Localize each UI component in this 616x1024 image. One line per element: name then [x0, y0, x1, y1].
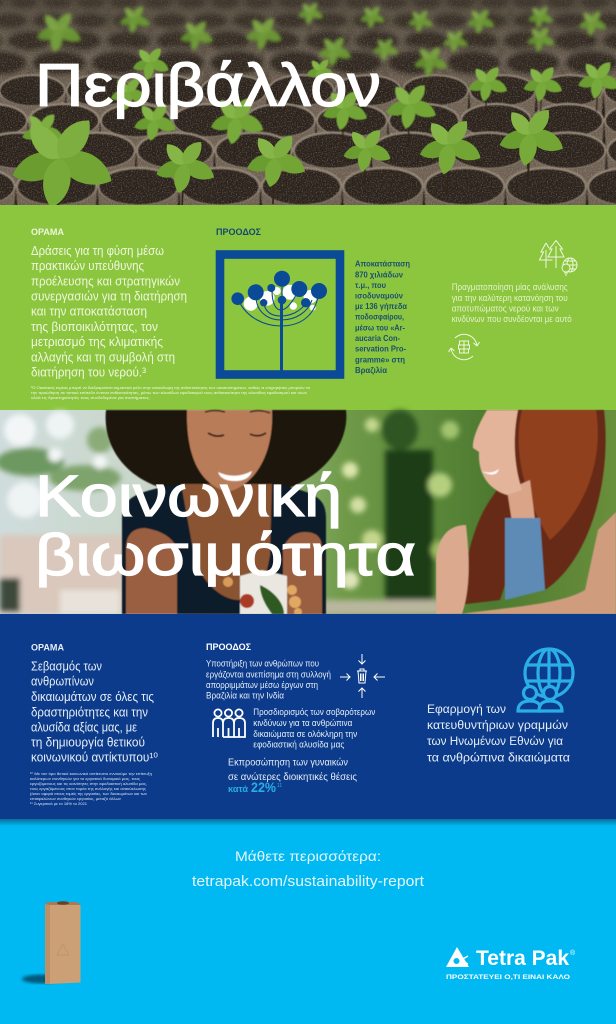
carton illustration — [22, 901, 80, 984]
vision text: διατήρηση του νερού.³ — [31, 366, 146, 380]
title: Κοινωνική βιωσιμότητα: βιωσιμότητα — [35, 523, 416, 588]
url: tetrapak.com/sustainability-report — [192, 874, 424, 890]
waste collectors text: απορριμμάτων μέσω έργων στη — [206, 680, 318, 690]
footnote: ³Ο Οικιστικός τομέας μπορεί να διαδραματίσει σημαντικό ρόλο στην αποκάλυψη της ανθεκτικότητας των οικοσυστημάτων, καθώς οι επιχειρήσεις μπορούν να — [31, 386, 311, 390]
statistic: 22% — [228, 779, 282, 795]
right woman — [458, 410, 606, 605]
statistic: 22%: κατά — [228, 784, 248, 794]
icon: globe and people — [518, 649, 573, 711]
waste collectors text — [206, 659, 331, 700]
UN guidelines text: τα ανθρώπινα δικαιώματα — [427, 752, 570, 764]
photo: seedlings in paper pots — [0, 0, 616, 237]
vision heading: ΟΡΑΜΑ — [31, 227, 64, 237]
human rights risks text: Προσδιορισμός των σοβαρότερων — [253, 707, 376, 717]
icon: waste bin with arrows — [340, 654, 385, 698]
progress text: τ.μ., που — [355, 280, 386, 290]
vision text: δικαιωμάτων σε όλες τις — [31, 690, 154, 704]
human rights risks text: κινδύνων για τα ανθρώπινα — [253, 718, 352, 728]
progress text: με 136 γήπεδα — [355, 301, 408, 311]
water footprint text — [452, 282, 572, 324]
progress heading: ΠΡΟΟΔΟΣ — [216, 227, 262, 237]
panel: footer — [0, 819, 616, 1024]
title: Κοινωνική βιωσιμότητα — [35, 464, 416, 588]
footnote: εργαζόμενους και τις κοινότητες στην εφοδιαστική αλυσίδα μας, — [30, 781, 147, 786]
progress heading: ΠΡΟΟΔΟΣ — [206, 642, 252, 652]
carton in hands — [240, 570, 287, 614]
progress text: ποδοσφαίρου, — [355, 312, 404, 322]
icon: trees and globe — [540, 240, 577, 275]
women representation text — [228, 756, 357, 783]
progress text: servation Pro- — [355, 344, 406, 354]
water footprint text: για την καλύτερη κατανόηση του — [452, 293, 568, 303]
women representation text: σε ανώτερες διοικητικές θέσεις — [228, 771, 357, 783]
footnote: επισφαλώνων συνθηκών εργασίας, μεταξύ άλλων — [30, 796, 121, 801]
vision text: αλλαγής και τη συμβολή στη — [31, 351, 175, 365]
learn more text: Μάθετε περισσότερα: — [235, 848, 381, 864]
progress text: 870 χιλιάδων — [355, 269, 403, 279]
vision text: δραστηριότητες και την — [31, 705, 148, 719]
logo: Tetra Pak: ΠΡΟΣΤΑΤΕΥΕΙ Ο,ΤΙ ΕΙΝΑΙ ΚΑΛΟ — [446, 974, 570, 981]
statistic: 22%: 22% — [251, 779, 276, 795]
footnote: αλλά τις δραστηριότητές τους συνδεδεμένα για συστήματος. — [31, 396, 150, 400]
footnote: ¹¹ Συγκριτικά με το 18% το 2021 — [30, 801, 87, 806]
title: Κοινωνική βιωσιμότητα: Κοινωνική — [35, 464, 342, 529]
footnote: ¹⁰ Με τον όρο θετικό κοινωνικό αντίκτυπο εννοούμε την επίτευξη — [30, 771, 152, 776]
icon: three people — [213, 709, 245, 737]
vision text: Δράσεις για τη φύση μέσω — [31, 244, 164, 258]
statistic: 22%: 11 — [277, 783, 282, 789]
human rights risks text: εφοδιαστική αλυσίδα μας — [253, 740, 345, 750]
vision text — [31, 244, 187, 380]
icon: araucaria tree logo — [220, 254, 340, 374]
vision text: ανθρωπίνων — [31, 675, 94, 689]
vision heading: ΟΡΑΜΑ — [31, 643, 64, 653]
vision text: κοινωνικού αντίκτυπου¹⁰ — [31, 751, 158, 765]
panel: social sustainability — [0, 614, 616, 819]
logo: Tetra Pak: Tetra Pak — [476, 947, 569, 970]
vision text: της βιοποικιλότητας, τον — [31, 320, 158, 334]
photo: two women with carton — [0, 410, 616, 616]
progress text — [355, 259, 410, 375]
vision text: πρακτικών υπεύθυνης — [31, 259, 144, 273]
progress text: Βραζιλία — [355, 365, 388, 375]
waste collectors text: Βραζιλία και την Ινδία — [206, 690, 284, 700]
footnote: καλύτερων συνθηκών για το εργατικό δυναμικό μας, τους — [30, 776, 140, 781]
footnote: τους εργαζόμενους στον τομέα της συλλογής και ανακύκλωσης — [30, 786, 146, 791]
panel: environment — [0, 205, 616, 410]
waste collectors text: Υποστήριξη των ανθρώπων που — [206, 659, 319, 669]
vision text — [31, 660, 158, 765]
footnote: την προώθηση σε τοπικό επίπεδο έντονα ανθεκτικότητας, μέσω των αλυσίδων εφοδιασμού τους ανθεκτικότητα της αλυσίδας εφοδιασμού και νέων — [31, 391, 307, 395]
footnote — [31, 386, 311, 400]
human rights risks text — [253, 707, 376, 750]
water footprint text: Πραγματοποίηση μίας ανάλυσης — [452, 282, 568, 292]
vision text: τη δημιουργία θετικού — [31, 736, 145, 750]
women representation text: Εκπροσώπηση των γυναικών — [228, 756, 348, 768]
UN guidelines text — [427, 704, 570, 764]
UN guidelines text: κατευθυντήριων γραμμών — [427, 720, 568, 732]
vision text: συνεργασιών για τη διατήρηση — [31, 290, 187, 304]
vision text: μετριασμό της κλιματικής — [31, 335, 163, 349]
footnote: (όσον αφορά στους τομείς της εργασίας, των δικαιωμάτων και των — [30, 791, 147, 796]
water footprint text: αποτυπώματος νερού και των — [452, 304, 559, 314]
vision text: και την αποκατάσταση — [31, 305, 147, 319]
UN guidelines text: Εφαρμογή των — [427, 704, 506, 716]
vision text: αλυσίδα αξίας μας, με — [31, 721, 137, 735]
progress text: gramme» στη — [355, 354, 405, 364]
logo: Tetra Pak: ® — [570, 949, 576, 957]
vision text: Σεβασμός των — [31, 660, 102, 674]
waste collectors text: εργάζονται ανεπίσημα στη συλλογή — [206, 669, 331, 679]
footnote — [30, 771, 152, 806]
left woman — [106, 410, 346, 492]
progress text: Αποκατάσταση — [355, 259, 410, 269]
progress text: ισοδυναμούν — [355, 290, 403, 300]
progress text: μέσω του «Ar- — [355, 322, 405, 332]
title: Περιβάλλον: Περιβάλλον — [35, 52, 381, 119]
UN guidelines text: των Ηνωμένων Εθνών για — [427, 736, 563, 748]
progress text: aucaria Con- — [355, 333, 400, 343]
human rights risks text: δικαιώματα σε ολόκληρη την — [253, 729, 358, 739]
logo: Tetra Pak — [446, 947, 576, 981]
vision text: προέλευσης και στρατηγικών — [31, 274, 180, 288]
water footprint text: κινδύνων που συνδέονται με αυτό — [452, 314, 572, 324]
icon: water cycle — [448, 334, 480, 360]
